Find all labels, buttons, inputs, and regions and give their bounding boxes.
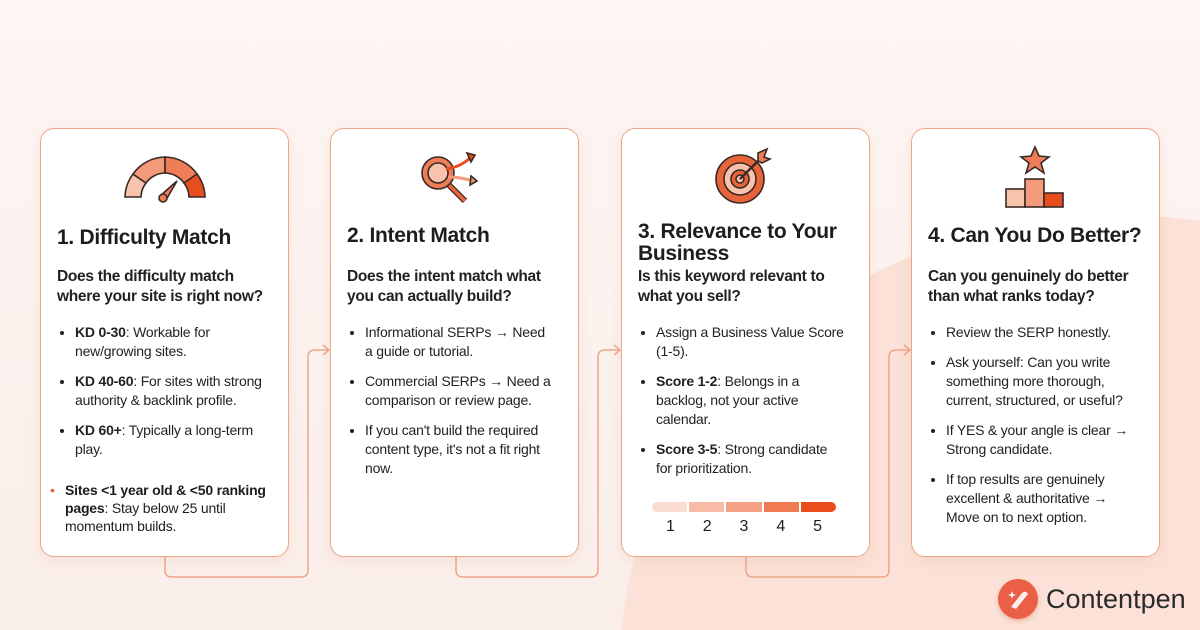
question: Is this keyword relevant to what you sell?: [638, 268, 825, 305]
bullets: Informational SERPs → Need a guide or tutorial.: [365, 324, 545, 359]
question: Can you genuinely do better than what ranks today?: [928, 268, 1128, 305]
panel: relevance: [621, 128, 870, 557]
heading: 2. Intent Match: [347, 224, 490, 247]
panel: difficulty match: [40, 128, 289, 557]
bullets: Score 3-5: Strong candidate for prioritization.: [656, 441, 827, 476]
icon: target: [715, 148, 772, 204]
bullets: If YES & your angle is clear → Strong candidate.: [946, 422, 1128, 457]
bullets: Assign a Business Value Score (1-5).: [656, 324, 844, 359]
bullets: KD 40-60: For sites with strong authority & backlink profile.: [75, 373, 262, 408]
bullets: KD 60+: Typically a long-term play.: [75, 422, 253, 457]
scale bar 1-5: 5: [813, 518, 822, 535]
question: Does the difficulty match where your site is right now?: [57, 268, 263, 305]
icon: podium star: [1005, 145, 1064, 208]
bullets: Ask yourself: Can you write something more thorough, current, structured, or useful?: [946, 354, 1123, 408]
scale bar 1-5: 3: [740, 518, 748, 535]
scale bar 1-5: 4: [776, 518, 785, 535]
bullets: If top results are genuinely excellent & authoritative → Move on to next option.: [946, 471, 1107, 525]
scale bar 1-5: 1: [666, 518, 675, 535]
bullets: [350, 324, 551, 476]
bullets: [60, 324, 262, 457]
bullets: Commercial SERPs → Need a comparison or review page.: [365, 373, 551, 408]
logo: Contentpen: [996, 579, 1186, 623]
icon: gauge: [124, 156, 206, 203]
callout: new sites: •: [50, 482, 55, 498]
scale bar 1-5: [652, 502, 836, 535]
heading: 4. Can You Do Better?: [928, 224, 1141, 247]
question: Does the intent match what you can actually build?: [347, 268, 541, 305]
heading: 3. Relevance to Your Business: [638, 220, 837, 265]
callout: new sites: Sites <1 year old & <50 ranking pages: Stay below 25 until momentum builds.: [65, 482, 266, 534]
heading: 1. Difficulty Match: [57, 226, 231, 249]
bullets: [931, 324, 1128, 525]
icon: magnifier: [421, 152, 478, 204]
bullets: Review the SERP honestly.: [946, 324, 1111, 340]
panel: can you do better: [911, 128, 1160, 557]
scale bar 1-5: 2: [703, 518, 712, 535]
panel: intent match: [330, 128, 579, 557]
bullets: [641, 324, 844, 476]
bullets: KD 0-30: Workable for new/growing sites.: [75, 324, 210, 359]
logo: Contentpen: Contentpen: [1046, 584, 1186, 614]
bullets: If you can't build the required content type, it's not a fit right now.: [365, 422, 540, 476]
bullets: Score 1-2: Belongs in a backlog, not your active calendar.: [656, 373, 799, 427]
